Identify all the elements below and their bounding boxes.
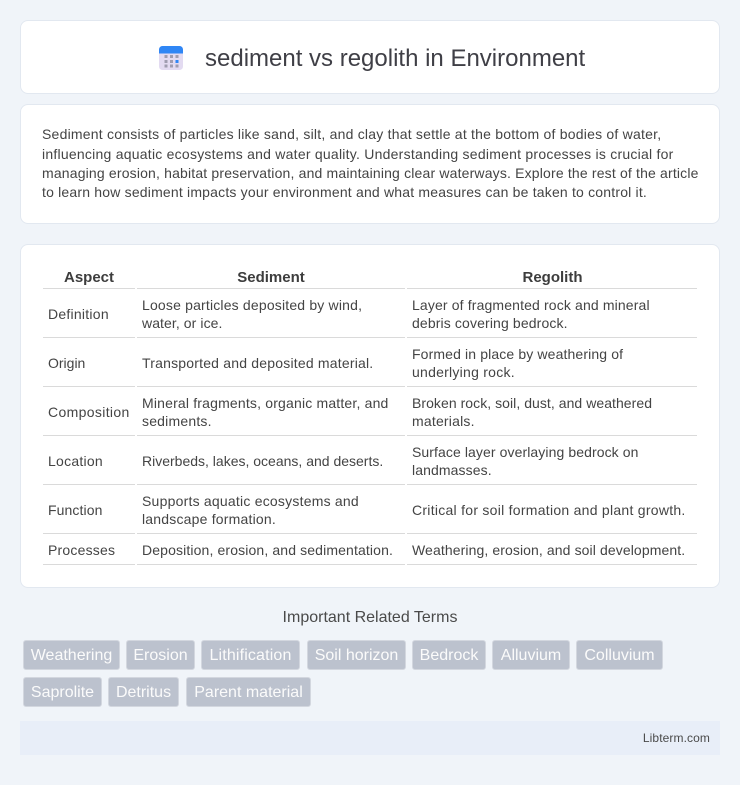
column headings: Aspect — [64, 269, 114, 286]
related terms heading: Important Related Terms — [283, 609, 457, 626]
related terms tags — [23, 640, 663, 707]
row: origin: Formed in place by weathering of — [412, 346, 623, 362]
related terms tags: Bedrock — [420, 647, 478, 664]
row: location: Location — [48, 453, 103, 469]
related terms tags: Erosion — [133, 647, 188, 664]
row: origin: Transported and deposited material. — [142, 355, 373, 371]
related terms tags: Colluvium — [584, 647, 655, 664]
row: definition: debris covering bedrock. — [412, 315, 568, 331]
row: origin: underlying rock. — [412, 364, 515, 380]
table card — [20, 244, 720, 588]
row: definition: Loose particles deposited by wind, — [142, 297, 362, 313]
column headings: Sediment — [237, 269, 305, 286]
title: sediment vs regolith in Environment — [205, 45, 585, 72]
row: definition: water, or ice. — [142, 315, 222, 331]
column headings — [64, 269, 582, 286]
intro card — [20, 104, 720, 224]
footer credit: Libterm.com — [643, 731, 710, 745]
row: composition: Mineral fragments, organic matter, and — [142, 395, 389, 411]
header card — [20, 20, 720, 94]
row: location: Riverbeds, lakes, oceans, and deserts. — [142, 453, 383, 469]
row: definition: Layer of fragmented rock and mineral — [412, 297, 650, 313]
row: composition: Broken rock, soil, dust, and weathered — [412, 395, 652, 411]
related terms tags: Lithification — [210, 647, 292, 664]
comparison table — [43, 269, 697, 565]
intro text: Sediment consists of particles like sand, silt, and clay that settle at the bottom of bodies of water, — [42, 126, 661, 142]
row: function: landscape formation. — [142, 511, 276, 527]
row: definition: Definition — [48, 306, 109, 322]
intro text: managing erosion, habitat preservation, and maintaining clear waterways. Explore the rest of the article — [42, 165, 699, 181]
intro text — [42, 126, 699, 200]
row: location: Surface layer overlaying bedrock on — [412, 444, 638, 460]
row: location: landmasses. — [412, 462, 492, 478]
row: composition: materials. — [412, 413, 475, 429]
row: processes: Weathering, erosion, and soil development. — [412, 542, 685, 558]
row: definition — [48, 297, 650, 331]
related terms tags: Parent material — [194, 684, 303, 701]
row: composition: sediments. — [142, 413, 212, 429]
related terms tags: Saprolite — [31, 684, 94, 701]
intro text: influencing aquatic ecosystems and water quality. Understanding sediment processes is crucial for — [42, 146, 674, 162]
related terms tags: Detritus — [116, 684, 171, 701]
row: function: Supports aquatic ecosystems and — [142, 493, 359, 509]
related terms tags: Weathering — [31, 647, 112, 664]
row: composition — [48, 395, 652, 429]
row: processes: Deposition, erosion, and sedimentation. — [142, 542, 393, 558]
row: processes: Processes — [48, 542, 115, 558]
row: processes — [48, 542, 685, 558]
row: function: Function — [48, 502, 102, 518]
row: origin — [48, 346, 624, 380]
icon: calendar — [159, 46, 183, 70]
footer bar — [20, 721, 720, 755]
related terms tags: Soil horizon — [315, 647, 398, 664]
row: composition: Composition — [48, 404, 130, 420]
row: function: Critical for soil formation and plant growth. — [412, 502, 686, 518]
related terms tags: Alluvium — [501, 647, 561, 664]
row: function — [48, 493, 686, 527]
intro text: to learn how sediment impacts your environment and what measures can be taken to control it. — [42, 184, 647, 200]
column headings: Regolith — [522, 269, 582, 286]
row: origin: Origin — [48, 355, 85, 371]
row: location — [48, 444, 638, 478]
